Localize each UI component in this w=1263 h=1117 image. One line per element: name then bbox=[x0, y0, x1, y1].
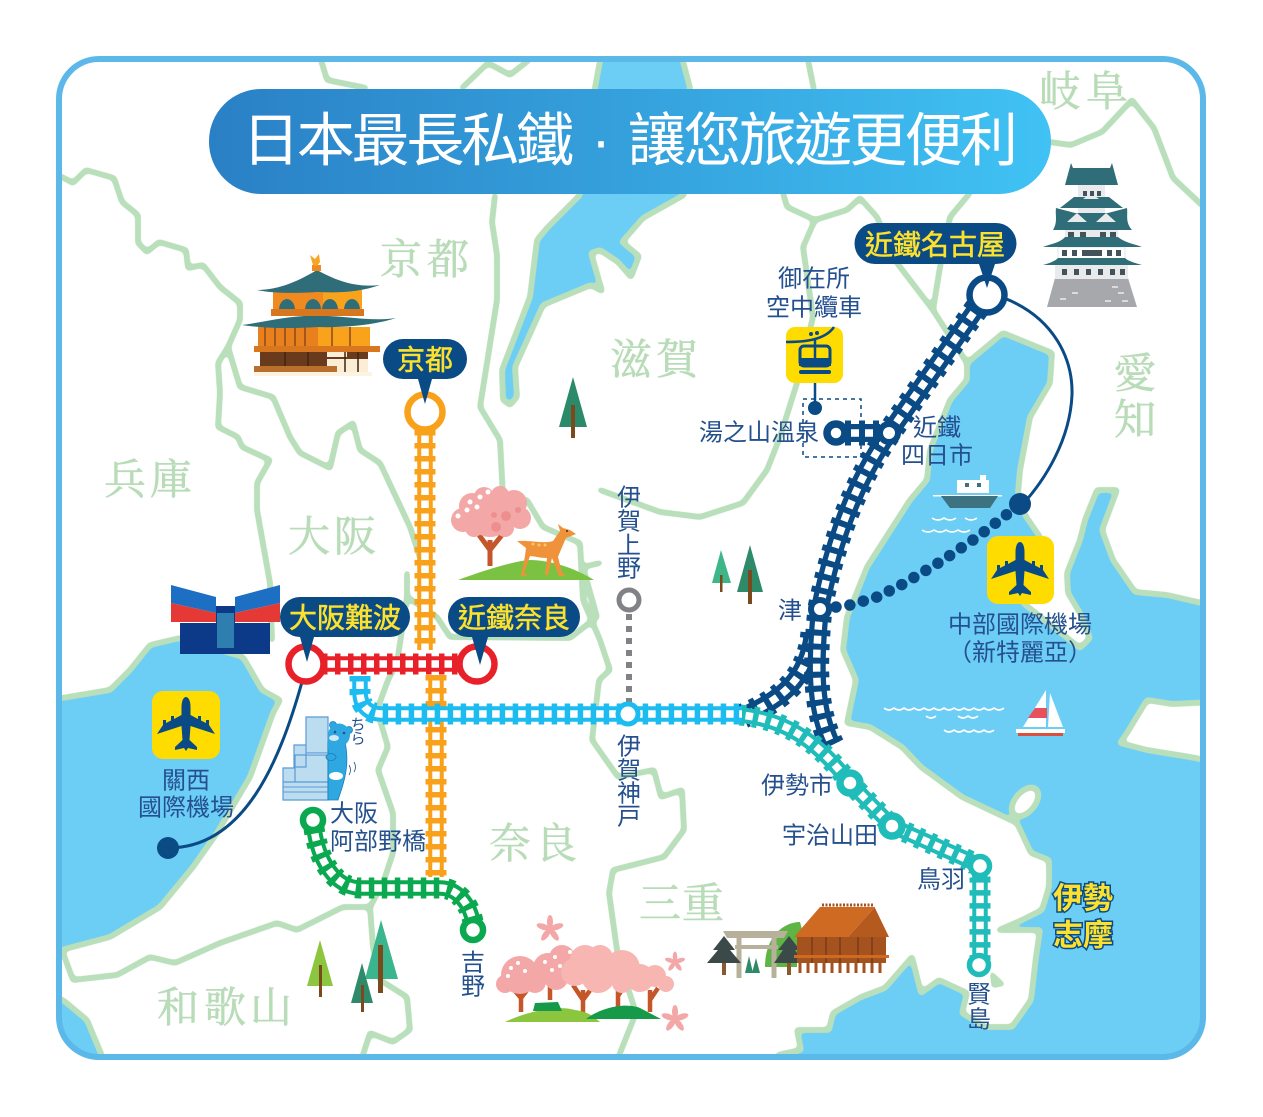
region name: Nara: 奈良 bbox=[489, 822, 577, 868]
icon: sailboat bbox=[1016, 690, 1065, 736]
icon: three trees in Wakayama bbox=[307, 920, 398, 1012]
region name: Wakayama: 和歌山 bbox=[157, 986, 292, 1032]
station: Yunoyama ring bbox=[827, 424, 845, 442]
label second line: （新特麗亞） bbox=[948, 640, 1092, 666]
label: Ise-shi: 伊勢市 bbox=[761, 772, 833, 800]
pill label: Kintetsu Nagoya bbox=[854, 223, 1016, 288]
region name: Kyoto: 京都 bbox=[380, 237, 469, 284]
line: gray Iga branch bbox=[619, 590, 639, 704]
region name: Osaka: 大阪 bbox=[288, 515, 376, 561]
icon: Kinkaku-ji golden pavilion bbox=[242, 254, 396, 376]
station: Osaka Abenobashi ring bbox=[303, 810, 323, 830]
icon: Osaka Namba building bbox=[171, 585, 280, 654]
label: Kansai airport: 關西 bbox=[162, 768, 210, 794]
title separator: · bbox=[591, 108, 611, 174]
waves near sailboat bbox=[884, 708, 1004, 732]
mascot sound text: ら bbox=[350, 730, 366, 748]
label: Chubu airport: 中部國際機場 bbox=[948, 612, 1092, 638]
label: Gozaisho ropeway bbox=[766, 266, 862, 322]
station: Kintetsu Nagoya ring bbox=[970, 278, 1004, 312]
icon: Chubu airport bbox=[987, 536, 1054, 604]
station: Iga-Kambe ring bbox=[618, 704, 638, 724]
label: Yunoyama Onsen: 湯之山溫泉 bbox=[699, 420, 819, 446]
icon: cherry blossom grove bbox=[496, 945, 674, 1022]
station: Kashikojima ring bbox=[970, 956, 988, 974]
region name: Mie: 三重 bbox=[639, 882, 724, 928]
icon: ferry bbox=[933, 475, 1002, 508]
line: Kansai airport link bbox=[157, 682, 302, 859]
label: Ise-Shima bbox=[1053, 882, 1113, 952]
southwest sea water bbox=[62, 1003, 98, 1054]
pill text: 近鐵名古屋 bbox=[865, 230, 1005, 260]
bay head shoal bbox=[990, 972, 1004, 988]
label: Yoshino: 吉野 bbox=[461, 950, 485, 1000]
station: Kyoto ring bbox=[408, 394, 442, 430]
cable car connector and dashed transfer box bbox=[803, 383, 861, 457]
label: Ise-Shima: 伊勢 bbox=[1053, 882, 1113, 916]
region name: Aichi: 愛知 bbox=[1114, 352, 1156, 444]
icon: Kansai airport bbox=[152, 691, 220, 759]
title text second part: 讓您旅遊更便利 bbox=[628, 108, 1018, 174]
Osaka Bay water bbox=[62, 641, 275, 947]
pill label: Kyoto bbox=[383, 339, 467, 404]
icon: Mt cable car badge bbox=[786, 327, 843, 383]
icon: Ise shrine and torii bbox=[707, 905, 889, 978]
icon: two trees near Tsu bbox=[712, 545, 763, 604]
rail line: red Nara bbox=[322, 654, 462, 674]
icon: tree in Shiga bbox=[559, 377, 587, 438]
label: Kansai airport bbox=[138, 768, 234, 822]
rail line: Yunoyama branch bbox=[845, 420, 880, 446]
title banner bbox=[209, 89, 1051, 194]
waves under ferry bbox=[922, 518, 977, 532]
Ise Bay and Pacific water bbox=[796, 337, 1200, 1054]
pill text: 近鐵奈良 bbox=[458, 602, 570, 634]
label: Iga-Kambe: 伊賀神戸 bbox=[617, 734, 641, 830]
line: Chubu airport link bbox=[836, 298, 1072, 607]
station: Kintetsu Nara ring bbox=[460, 646, 494, 682]
mascot sound text: ち bbox=[350, 716, 366, 734]
label: Tsu: 津 bbox=[778, 598, 802, 624]
pill label: Kintetsu Nara bbox=[448, 597, 580, 665]
rail line: green Yoshino bbox=[314, 828, 473, 922]
rail line: teal Ise-Shima bbox=[740, 715, 980, 960]
label: Kintetsu Yokkaichi: 近鐵 bbox=[913, 414, 961, 442]
station: Tsu ring bbox=[811, 600, 829, 618]
label: Kashikojima: 賢島 bbox=[967, 982, 991, 1034]
icon: pink petal top bbox=[536, 915, 564, 942]
region name: Hyogo: 兵庫 bbox=[104, 458, 192, 504]
label: Osaka Abenobashi bbox=[330, 800, 426, 856]
label second line: 志摩 bbox=[1053, 920, 1113, 952]
label: Toba: 鳥羽 bbox=[917, 866, 965, 894]
label: Iga-Ueno: 伊賀上野 bbox=[617, 484, 641, 582]
station: Yokkaichi ring bbox=[880, 424, 898, 442]
label: Gozaisho ropeway: 御在所 bbox=[778, 266, 850, 292]
rail line: orange Kyoto bbox=[425, 430, 436, 877]
pill text: 大阪難波 bbox=[289, 602, 401, 634]
rail line: navy branch to west bbox=[743, 633, 813, 716]
label second line: 國際機場 bbox=[138, 794, 234, 822]
station: Ise ring bbox=[840, 773, 860, 793]
icon: Nagoya castle bbox=[1043, 163, 1142, 307]
label second line: 空中纜車 bbox=[766, 294, 862, 322]
rail line: light blue Osaka Line bbox=[360, 676, 742, 714]
label: Ujiyamada: 宇治山田 bbox=[782, 822, 878, 850]
label second line: 四日市 bbox=[901, 442, 973, 470]
title text: 日本最長私鐵 bbox=[242, 108, 574, 174]
station: Osaka Namba ring bbox=[288, 646, 324, 682]
icon: pink petal middle bbox=[664, 952, 686, 972]
Lake Biwa water bbox=[502, 50, 690, 405]
label: Kintetsu Yokkaichi bbox=[901, 414, 973, 470]
region name: Gifu: 岐阜 bbox=[1039, 70, 1128, 116]
navy line tapered end bbox=[824, 742, 847, 768]
region name: Shiga: 滋賀 bbox=[610, 338, 701, 384]
icon: Abeno Harukas tower and bear mascot bbox=[283, 716, 366, 800]
icon: pink petal lower bbox=[661, 1005, 689, 1032]
label second line: 阿部野橋 bbox=[330, 828, 426, 856]
icon: Nara deer and cherry tree bbox=[451, 486, 594, 580]
pill text: 京都 bbox=[397, 344, 453, 376]
label: Osaka Abenobashi: 大阪 bbox=[330, 800, 378, 828]
label: Chubu airport bbox=[948, 612, 1092, 666]
rail line: navy Nagoya to Ise bbox=[817, 308, 977, 768]
station: Yoshino ring bbox=[463, 920, 483, 940]
small island land bbox=[1014, 790, 1036, 814]
pill label: Osaka Namba bbox=[280, 597, 410, 662]
Atsumi peninsula land bbox=[1126, 704, 1200, 756]
station: Toba ring bbox=[970, 856, 990, 876]
station: Ujiyamada ring bbox=[882, 816, 902, 836]
